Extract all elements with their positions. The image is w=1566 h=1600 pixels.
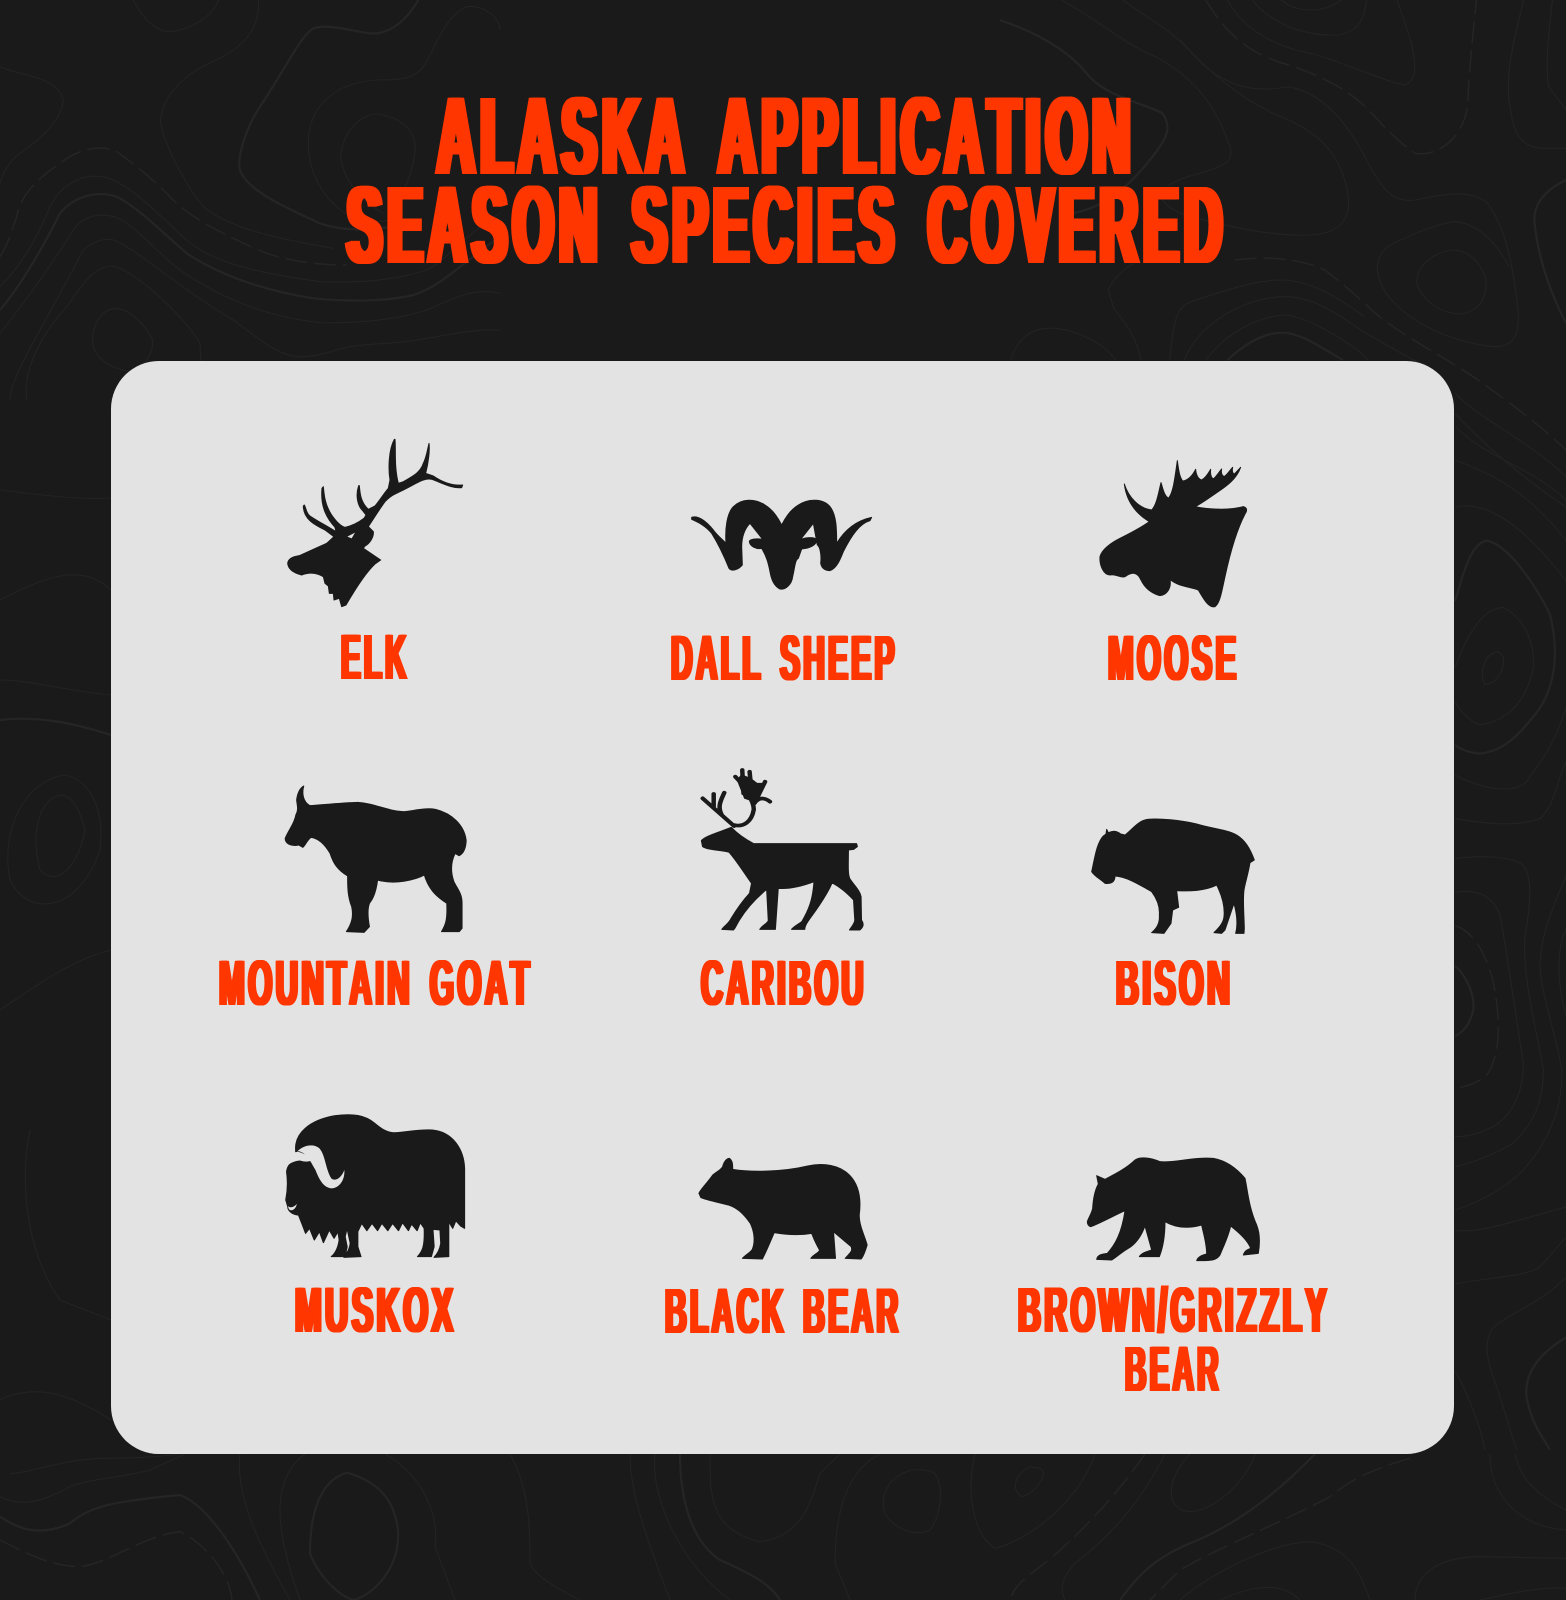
title — [344, 75, 1228, 287]
panel: species grid — [111, 361, 1454, 1454]
label: brown/grizzly bear: BEAR — [1125, 1333, 1222, 1405]
icon: dall sheep — [692, 500, 872, 589]
icon: moose — [1100, 461, 1247, 607]
label: brown/grizzly bear: BROWN/GRIZZLY — [1018, 1274, 1330, 1346]
label: brown/grizzly bear — [1018, 1274, 1330, 1405]
icon: brown grizzly bear — [1087, 1158, 1259, 1261]
label: black bear: BLACK BEAR — [665, 1275, 901, 1347]
icon: muskox — [286, 1115, 465, 1257]
label: muskox: MUSKOX — [295, 1274, 456, 1346]
icon: mountain goat — [285, 786, 466, 932]
label: moose: MOOSE — [1108, 622, 1239, 694]
label: caribou: CARIBOU — [701, 947, 867, 1019]
icon: black bear — [699, 1158, 867, 1259]
title line 1: ALASKA APPLICATION — [437, 75, 1136, 198]
icon: elk — [288, 439, 463, 607]
label: elk: ELK — [341, 621, 410, 693]
icon: bison — [1092, 819, 1254, 933]
icon: caribou — [701, 770, 863, 930]
label: bison: BISON — [1116, 947, 1233, 1019]
label: dall sheep: DALL SHEEP — [671, 622, 898, 694]
label: mountain goat: MOUNTAIN GOAT — [219, 947, 533, 1019]
title line 2: SEASON SPECIES COVERED — [347, 164, 1228, 287]
